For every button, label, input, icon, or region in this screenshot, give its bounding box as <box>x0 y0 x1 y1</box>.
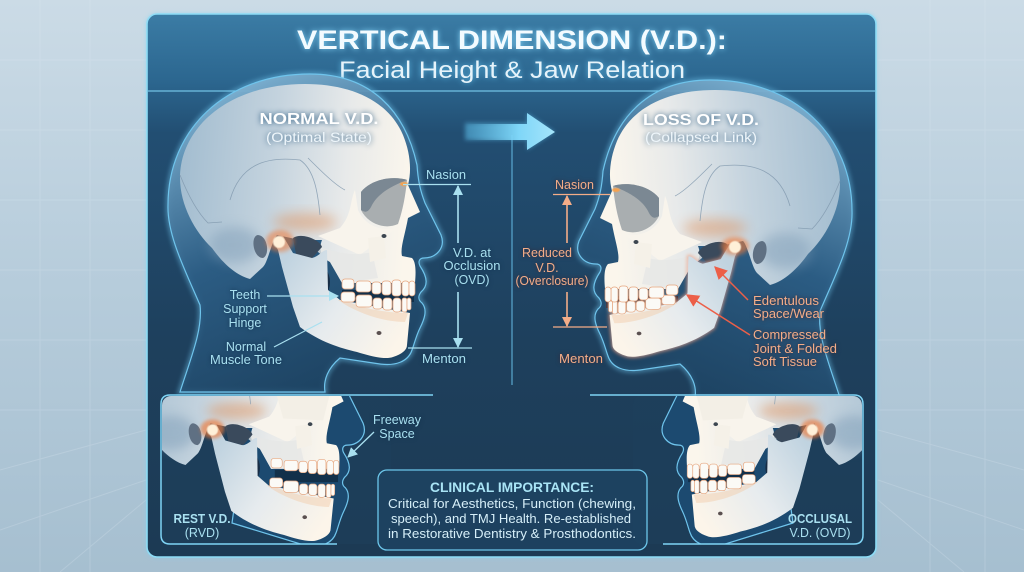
label: compressed joint <box>687 295 837 369</box>
label: menton loss: Menton <box>559 352 603 366</box>
label: compressed joint: Joint & Folded <box>753 342 837 356</box>
label: reduced V.D.: (Overclosure) <box>516 274 588 288</box>
label: rest V.D.: (RVD) <box>185 526 219 540</box>
arrow: occlusal dimension <box>457 186 459 347</box>
label: reduced V.D. <box>516 246 588 288</box>
label: edentulous space: Edentulous <box>753 294 819 308</box>
label: V.D. at occlusion: (OVD) <box>454 273 490 287</box>
label: V.D. at occlusion: Occlusion <box>444 259 501 273</box>
callout: clinical importance <box>378 470 647 550</box>
heading: normal: NORMAL V.D. <box>260 111 378 128</box>
title: Facial Height & Jaw Relation <box>339 57 685 84</box>
label: menton: Menton <box>422 352 466 366</box>
label: compressed joint: Soft Tissue <box>753 355 817 369</box>
label: compressed joint: Compressed <box>753 328 826 342</box>
label: freeway space: Space <box>379 427 415 441</box>
label: edentulous space <box>715 267 824 321</box>
title <box>297 25 727 84</box>
panel: rest V.D. <box>160 394 433 545</box>
label: normal muscle tone: Normal <box>226 340 266 354</box>
label: rest V.D.: REST V.D. <box>174 512 230 526</box>
label: reduced V.D.: Reduced <box>522 246 572 260</box>
label: normal muscle tone <box>210 322 322 367</box>
callout: clinical importance: Critical for Aesthetics, Function (chewing, <box>388 496 636 511</box>
main panel <box>146 13 877 558</box>
label: nasion loss: Nasion <box>555 178 594 192</box>
label: occlusal V.D.: V.D. (OVD) <box>790 526 850 540</box>
heading: loss: (Collapsed Link) <box>645 129 757 145</box>
arrow: reduced dimension <box>566 196 568 326</box>
label: teeth support hinge: Support <box>223 302 267 316</box>
label: rest V.D. <box>174 512 230 540</box>
label: teeth support hinge: Hinge <box>229 316 261 330</box>
label: freeway space <box>348 413 422 457</box>
heading: loss <box>643 112 759 145</box>
callout: clinical importance: CLINICAL IMPORTANCE: <box>430 479 594 495</box>
label: teeth support hinge: Teeth <box>230 288 260 302</box>
arrow: normal to loss <box>465 113 555 150</box>
label: V.D. at occlusion <box>444 246 501 287</box>
callout: clinical importance: speech), and TMJ Health. Re-established <box>391 511 631 526</box>
heading: loss: LOSS OF V.D. <box>643 112 759 129</box>
label: edentulous space: Space/Wear <box>753 307 824 321</box>
panel: loss of V.D. skull <box>516 80 852 398</box>
panel: normal V.D. skull <box>168 74 501 392</box>
label: nasion: Nasion <box>426 168 466 182</box>
label: occlusal V.D. <box>788 512 852 540</box>
label: freeway space: Freeway <box>373 413 422 427</box>
label: normal muscle tone: Muscle Tone <box>210 353 282 367</box>
label: teeth support hinge <box>223 288 338 330</box>
title: VERTICAL DIMENSION (V.D.): <box>297 25 727 55</box>
callout: clinical importance: in Restorative Dentistry & Prosthodontics. <box>388 526 636 541</box>
panel: occlusal V.D. <box>590 394 864 545</box>
label: reduced V.D.: V.D. <box>535 261 559 275</box>
heading: normal: (Optimal State) <box>266 129 372 145</box>
label: V.D. at occlusion: V.D. at <box>453 246 492 260</box>
label: occlusal V.D.: OCCLUSAL <box>788 512 852 526</box>
heading: normal <box>260 111 378 145</box>
